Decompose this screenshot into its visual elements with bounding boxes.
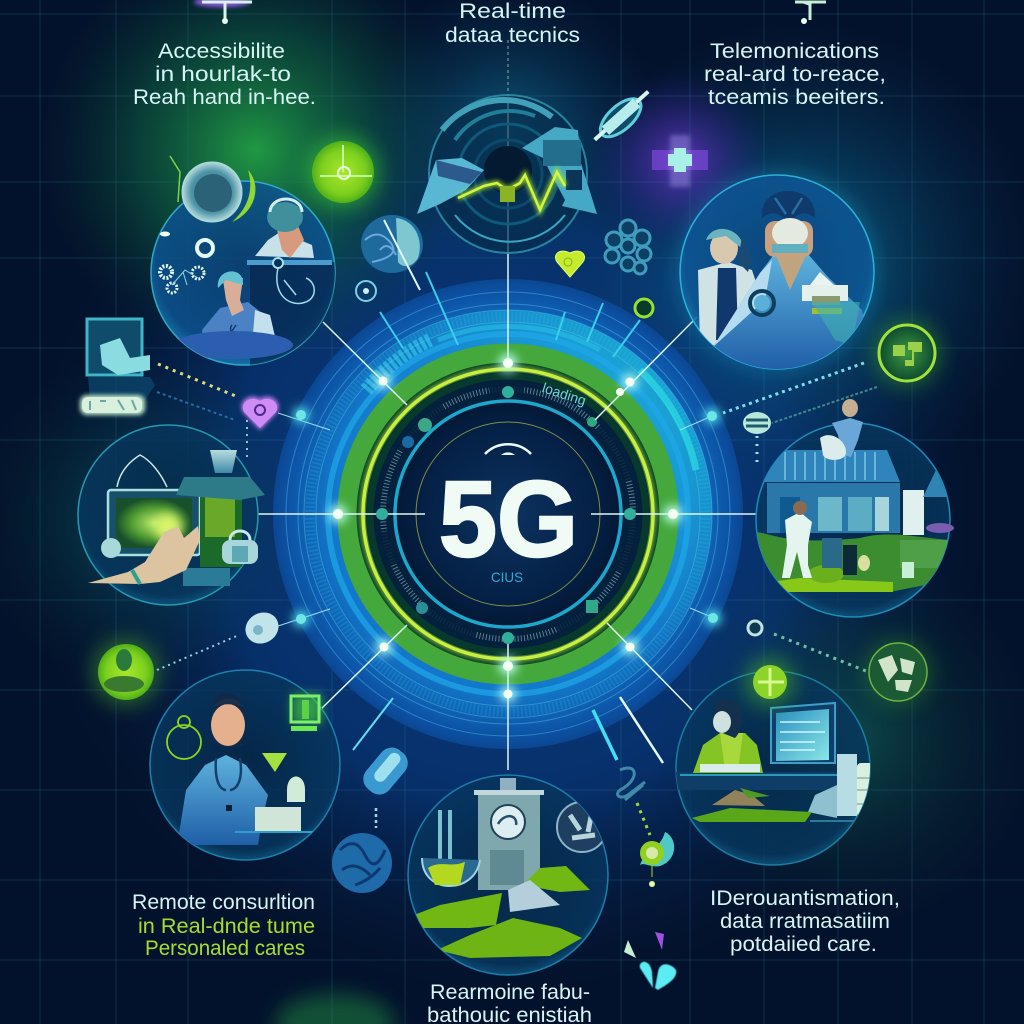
icon: purple heart	[241, 397, 279, 430]
icon: small oval badge	[743, 412, 771, 434]
icon: green small badge near ring	[635, 299, 653, 317]
icon: top antennas	[194, 0, 826, 24]
heading: top center text: Real-time	[459, 0, 566, 23]
icon: signal arc	[485, 444, 531, 455]
icon: lens device	[170, 156, 255, 222]
icon: lime badge	[92, 638, 160, 706]
central 5G hub	[273, 279, 743, 749]
icon: hand	[88, 513, 200, 584]
icon: right headset	[522, 127, 597, 214]
icon: side case	[222, 531, 258, 564]
figure: operator	[693, 700, 763, 773]
chart: heartbeat line	[458, 172, 565, 210]
icon: lime triangle	[262, 753, 287, 772]
figure: nurse	[178, 693, 268, 845]
heading: top left text: Reah hand in-hee.	[133, 86, 316, 109]
icon: clock tower	[474, 778, 544, 890]
icon: lime heart	[555, 251, 585, 277]
icon: capsule	[358, 742, 413, 800]
connector lines	[258, 40, 757, 770]
panel: top left doctors bubble	[151, 156, 340, 370]
panel: bottom right operator bubble	[676, 671, 890, 865]
heading: top right text	[704, 40, 886, 109]
icon: green landscape strip	[692, 788, 812, 822]
panel: bottom left nurse bubble	[150, 670, 340, 860]
heading: bottom left text: Personaled cares	[145, 937, 305, 960]
icon: lime plus	[746, 658, 794, 706]
icon: green square	[291, 694, 322, 731]
heading: top right text: real-ard to-reace,	[704, 63, 886, 86]
icon: box with chips	[80, 319, 155, 415]
icon: leaf shapes	[624, 932, 664, 958]
heading: bottom center text: Rearmoine fabu-	[430, 981, 590, 1004]
heading: top left text	[133, 40, 316, 109]
icon: server	[808, 754, 870, 818]
icon: blue organ	[332, 833, 392, 893]
tick marks ring: loading	[540, 379, 588, 409]
heading: bottom left text: in Real-dnde tume	[138, 915, 315, 938]
heading: top left text: in hourlak-to	[155, 63, 291, 86]
icon: wheel	[557, 802, 607, 852]
icon: tech collage badge	[864, 638, 932, 706]
heading: top right text: tceamis beeiters.	[708, 86, 885, 109]
tick marks ring	[383, 379, 633, 639]
heading: top center text	[445, 0, 580, 47]
connector: left dotted lines	[157, 364, 247, 462]
figure: person on roof	[820, 399, 863, 460]
heading: bottom left text: Remote consurltion	[132, 891, 315, 914]
icon: gear tag	[748, 621, 762, 635]
icon: data monitor	[771, 703, 835, 763]
icon: medical device	[802, 272, 860, 345]
icon: brain left	[361, 215, 423, 290]
heading: bottom center text	[427, 981, 592, 1024]
icon: green landscape	[757, 532, 950, 592]
icon: floating gadget	[618, 768, 645, 800]
figure: left clinician	[698, 229, 762, 345]
connector: gadget dots	[637, 803, 650, 835]
figure: upper doctor	[255, 199, 314, 258]
icon: lime bud	[640, 832, 674, 887]
icon: small device	[101, 538, 121, 558]
glowing nodes	[293, 354, 721, 702]
icon: purple medical cross	[652, 135, 708, 187]
icon: cyan heart	[640, 962, 676, 990]
icon: green ball	[307, 136, 379, 208]
panel: right rural house bubble	[756, 399, 960, 617]
icon: green rings	[167, 716, 201, 759]
figure: front clinician	[713, 191, 875, 370]
icon: neural tangle	[605, 220, 651, 274]
icon: purple cluster	[926, 523, 954, 533]
heading: top left text: Accessibilite	[158, 40, 285, 63]
icon: tool and bowl	[422, 810, 480, 886]
icon: small ring tag	[356, 281, 376, 301]
connector: right dotted lines	[723, 363, 877, 462]
outer blue rings	[273, 279, 743, 749]
panel: bottom center hospital bubble	[396, 775, 608, 975]
icon: left headset	[417, 158, 484, 214]
panel: top right clinicians bubble	[677, 172, 877, 372]
heading: top center text: dataa tecnics	[445, 24, 580, 47]
title: 5G: 5G	[439, 458, 578, 579]
green ring	[347, 353, 669, 675]
icon: device cup	[210, 450, 237, 473]
heading: bottom right text	[710, 887, 900, 956]
icons: gears	[160, 240, 213, 293]
icon: green hills	[416, 866, 590, 958]
connector: lower right dotted	[774, 634, 866, 671]
connector: capsule dots	[375, 808, 377, 828]
heading: bottom right text: potdaiied care.	[730, 933, 877, 956]
icon: desk device	[235, 807, 320, 832]
connector: lower left dotted	[157, 635, 239, 670]
label: CIUS: CIUS	[491, 569, 523, 585]
icon: pale chip	[240, 607, 284, 649]
heading: bottom left text	[132, 891, 315, 960]
heading: bottom right text: IDerouantismation,	[710, 887, 900, 910]
core circle	[395, 401, 621, 627]
figure: lower doctor	[202, 271, 275, 335]
panel: left monitor bubble	[78, 425, 265, 605]
heading: top right text: Telemonications	[710, 40, 879, 63]
panel: top center ECG scene	[417, 94, 597, 254]
icon: house	[758, 450, 900, 533]
icon: green circuit badge	[873, 319, 941, 387]
icon: syringe	[587, 83, 657, 149]
heading: bottom right text: data rratmasatiim	[720, 910, 890, 933]
figure: man in white	[782, 501, 812, 578]
icon: equipment	[822, 538, 870, 575]
